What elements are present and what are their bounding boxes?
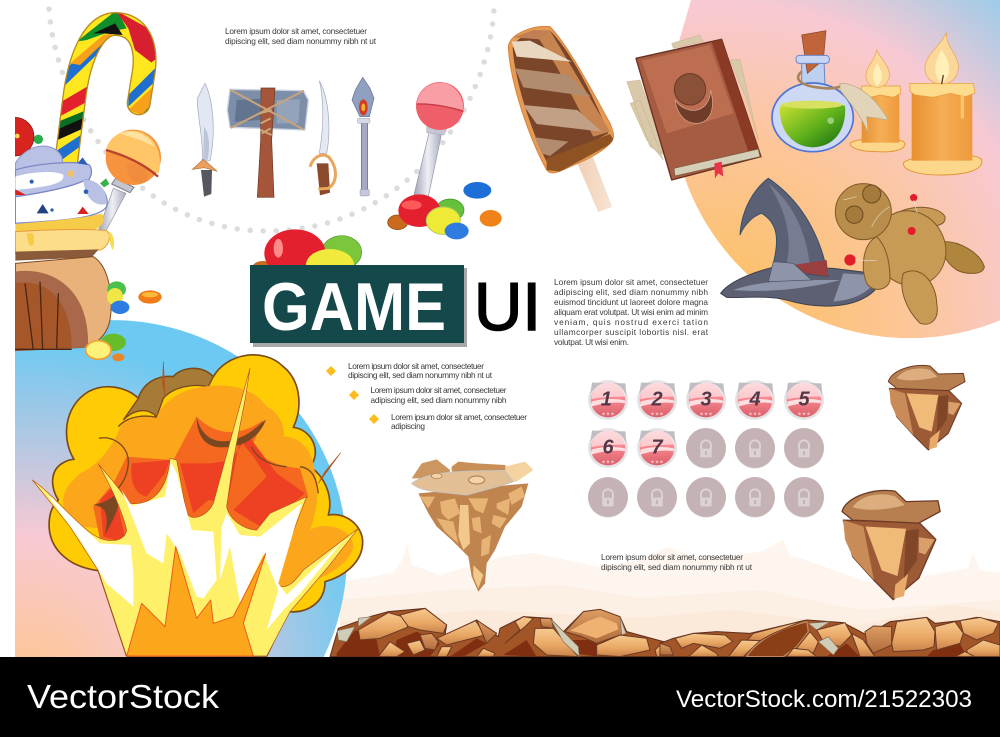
background: desert silhouette xyxy=(340,540,1000,657)
level 2 xyxy=(637,380,677,420)
level 2: ★★★ xyxy=(650,411,664,417)
text block: intro paragraph: volutpat. Ut wisi enim. xyxy=(554,337,629,347)
icon: lower right floating island xyxy=(842,491,940,600)
locked levels xyxy=(588,428,824,518)
text block: intro paragraph xyxy=(554,277,709,347)
icon: large floating island xyxy=(412,459,533,592)
level 7: ★★★ xyxy=(650,459,664,465)
level 4: ★★★ xyxy=(748,411,762,417)
watermark logo: VectorStock xyxy=(27,678,220,715)
text block: bottom caption: Lorem ipsum dolor sit amet, consectetuer xyxy=(601,552,743,562)
title: Game UI: UI xyxy=(474,269,541,345)
explosion xyxy=(32,355,363,656)
rocks: left section xyxy=(330,608,670,657)
text block: top caption xyxy=(225,26,377,46)
bullet 3: Lorem ipsum dolor sit amet, consectetuer xyxy=(391,412,527,422)
level 5: 5 xyxy=(798,388,810,410)
level 3: ★★★ xyxy=(699,411,713,417)
level 2: 2 xyxy=(650,388,663,410)
icon: candy cane xyxy=(56,12,157,162)
icon: pink lollipop with candies xyxy=(388,82,502,239)
background: bottom left gradient circle xyxy=(15,320,347,657)
icon: voodoo doll xyxy=(835,184,984,324)
level 1 xyxy=(588,380,628,420)
text block: intro paragraph: veniam, quis nostrud exerci tation xyxy=(554,317,708,327)
icon: potion bottle xyxy=(772,31,853,152)
title: Game UI xyxy=(250,265,541,347)
level 7 xyxy=(637,428,677,468)
icon: battle axe xyxy=(227,88,308,197)
level 3 xyxy=(686,380,726,420)
icon: parchment tag xyxy=(840,83,888,133)
icon: upper right floating island xyxy=(888,365,965,450)
level buttons grid xyxy=(588,380,824,518)
text block: bottom caption xyxy=(601,552,753,572)
text block: intro paragraph: ullamcorper suscipit lobortis nisl. erat xyxy=(554,327,709,337)
icon: saber sword xyxy=(192,83,217,197)
icon: curved sword xyxy=(310,81,335,195)
level 1: ★★★ xyxy=(601,411,615,417)
bullet 1: Lorem ipsum dolor sit amet, consectetuer xyxy=(348,361,484,371)
icon: witch hat xyxy=(721,178,875,306)
text block: intro paragraph: euismod tincidunt ut laoreet dolore magna xyxy=(554,297,708,307)
text block: intro paragraph: adipiscing elit, sed diam nonummy nibh xyxy=(554,287,708,297)
title: Game UI: GAME xyxy=(262,269,446,345)
bullet 2: Lorem ipsum dolor sit amet, consectetuer xyxy=(370,385,507,395)
icon: large candle xyxy=(903,32,982,175)
level 3: 3 xyxy=(700,388,712,410)
level 1: 1 xyxy=(601,388,612,410)
bullet 1: dipiscing elit, sed diam nonummy nibh nt ut xyxy=(348,370,493,380)
level 5: ★★★ xyxy=(797,411,811,417)
icon: magic staff xyxy=(352,77,374,196)
level 6: 6 xyxy=(602,436,614,458)
icon: small candle xyxy=(850,50,905,152)
background: dotted arc xyxy=(49,9,494,231)
level 6: ★★★ xyxy=(601,459,615,465)
bullet 3: adipiscing xyxy=(391,421,425,431)
icon: cupcake house xyxy=(0,117,162,361)
icon: orange lollipop xyxy=(99,130,161,231)
watermark footer bar xyxy=(0,657,1000,737)
text block: bottom caption: dipiscing elit, sed diam nonummy nibh nt ut xyxy=(601,562,753,572)
bullet 3 xyxy=(369,412,527,431)
bullet 2 xyxy=(349,385,507,405)
text block: intro paragraph: Lorem ipsum dolor sit amet, consectetuer xyxy=(554,277,708,287)
level 4: 4 xyxy=(748,388,761,410)
bullet 1 xyxy=(326,361,493,380)
watermark image id: VectorStock.com/21522303 xyxy=(676,686,972,713)
background: top right gradient circle xyxy=(672,0,1000,338)
text block: top caption: dipiscing elit, sed diam nonummy nibh nt ut xyxy=(225,36,377,46)
level 7: 7 xyxy=(651,436,663,458)
icon: spell book xyxy=(627,35,761,180)
bullet 2: adipiscing elit, sed diam nonummy nibh xyxy=(370,395,507,405)
rocks: right section xyxy=(660,617,1000,657)
text block: top caption: Lorem ipsum dolor sit amet, consectetuer xyxy=(225,26,367,36)
level 6 xyxy=(588,428,628,468)
text block: intro paragraph: aliquam erat volutpat. Ut wisi enim ad minim xyxy=(554,307,708,317)
rocky ground xyxy=(330,608,1000,657)
level 4 xyxy=(735,380,775,420)
level 5 xyxy=(784,380,824,420)
icon: title candies xyxy=(252,229,362,281)
icon: chocolate popsicle xyxy=(508,26,615,212)
list: bullet items xyxy=(326,361,527,431)
